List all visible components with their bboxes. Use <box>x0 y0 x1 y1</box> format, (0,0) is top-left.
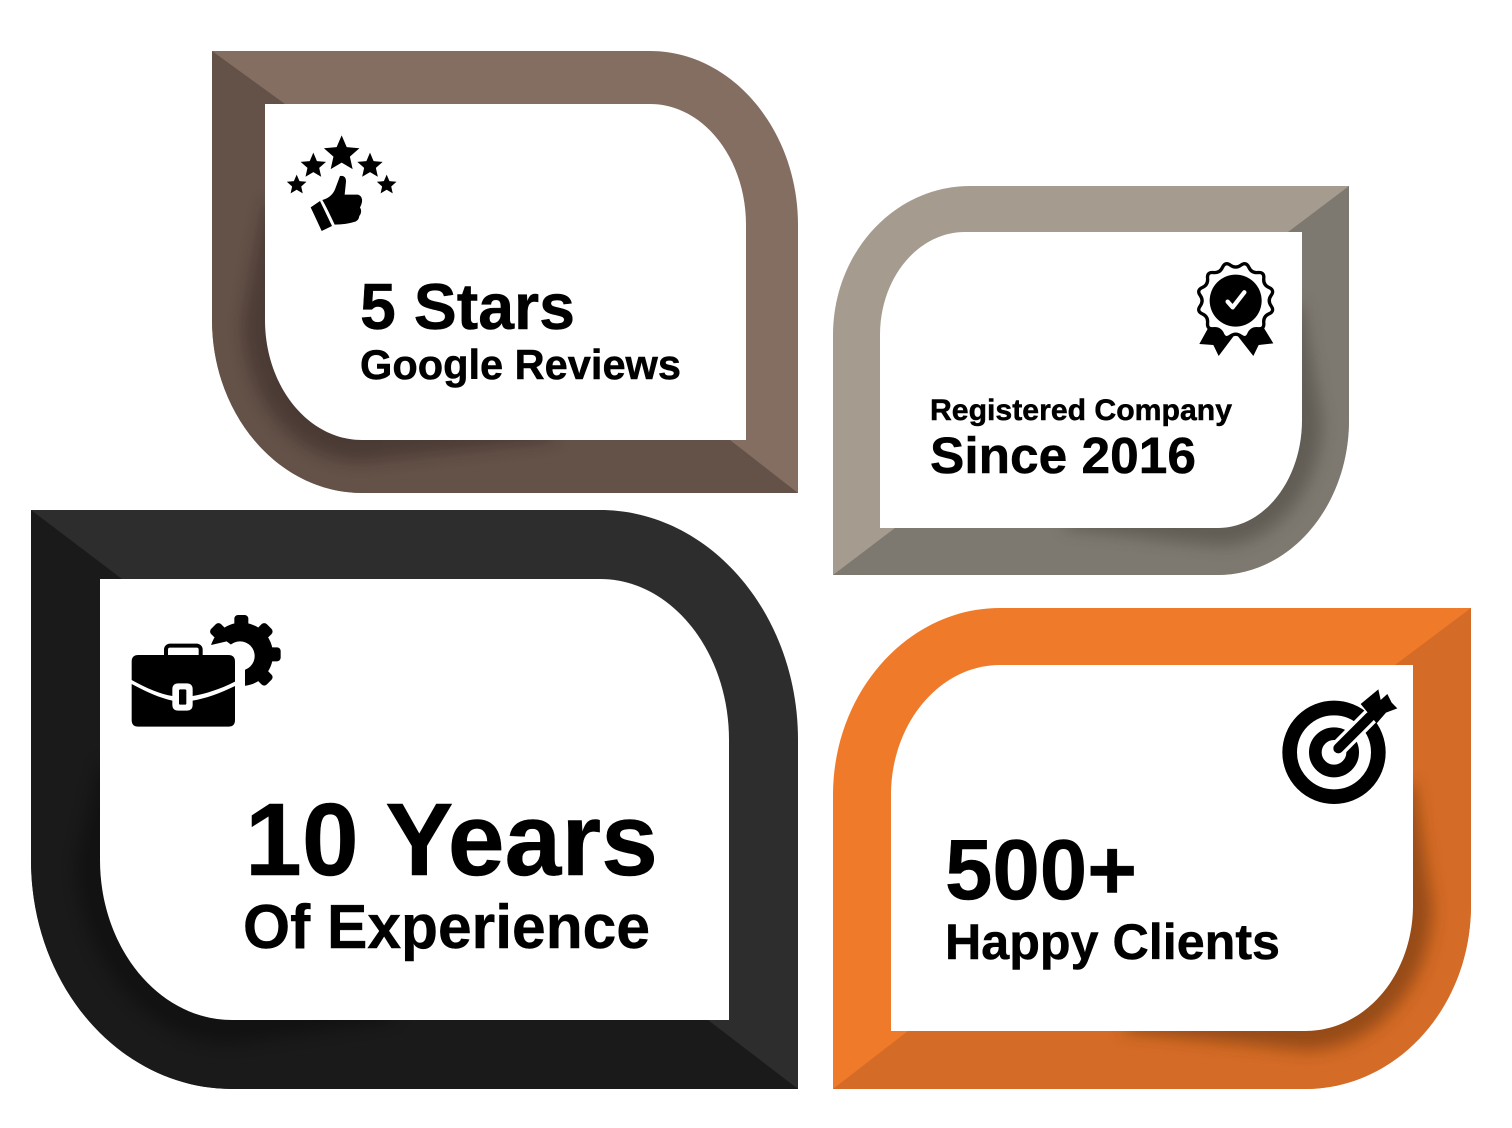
icon: briefcase with gear <box>132 615 281 727</box>
panel: 10 years of experience <box>31 510 798 1089</box>
heading: 500+: 500+ <box>945 823 1137 918</box>
subheading: Of Experience: Of Experience <box>243 893 650 962</box>
heading: 10 Years: 10 Years <box>245 782 658 897</box>
icon: target with arrow <box>1290 689 1397 797</box>
heading: 5 Stars: 5 Stars <box>360 270 575 343</box>
panel: registered company since 2016 <box>833 186 1349 575</box>
panel frame: orange <box>833 608 1471 1089</box>
icon: award rosette with check <box>1199 264 1273 356</box>
panel frame: brown <box>212 51 798 493</box>
panel frame: taupe <box>833 186 1349 575</box>
subheading: Happy Clients: Happy Clients <box>945 914 1280 970</box>
subheading: Registered Company: Registered Company <box>930 394 1232 427</box>
panel: 5 stars google reviews <box>212 51 798 493</box>
panel: 500+ happy clients <box>833 608 1471 1089</box>
heading: Since 2016: Since 2016 <box>930 427 1196 484</box>
icon: thumbs up with five stars <box>287 135 396 231</box>
subheading: Google Reviews: Google Reviews <box>360 341 681 388</box>
panel frame: charcoal <box>31 510 798 1089</box>
